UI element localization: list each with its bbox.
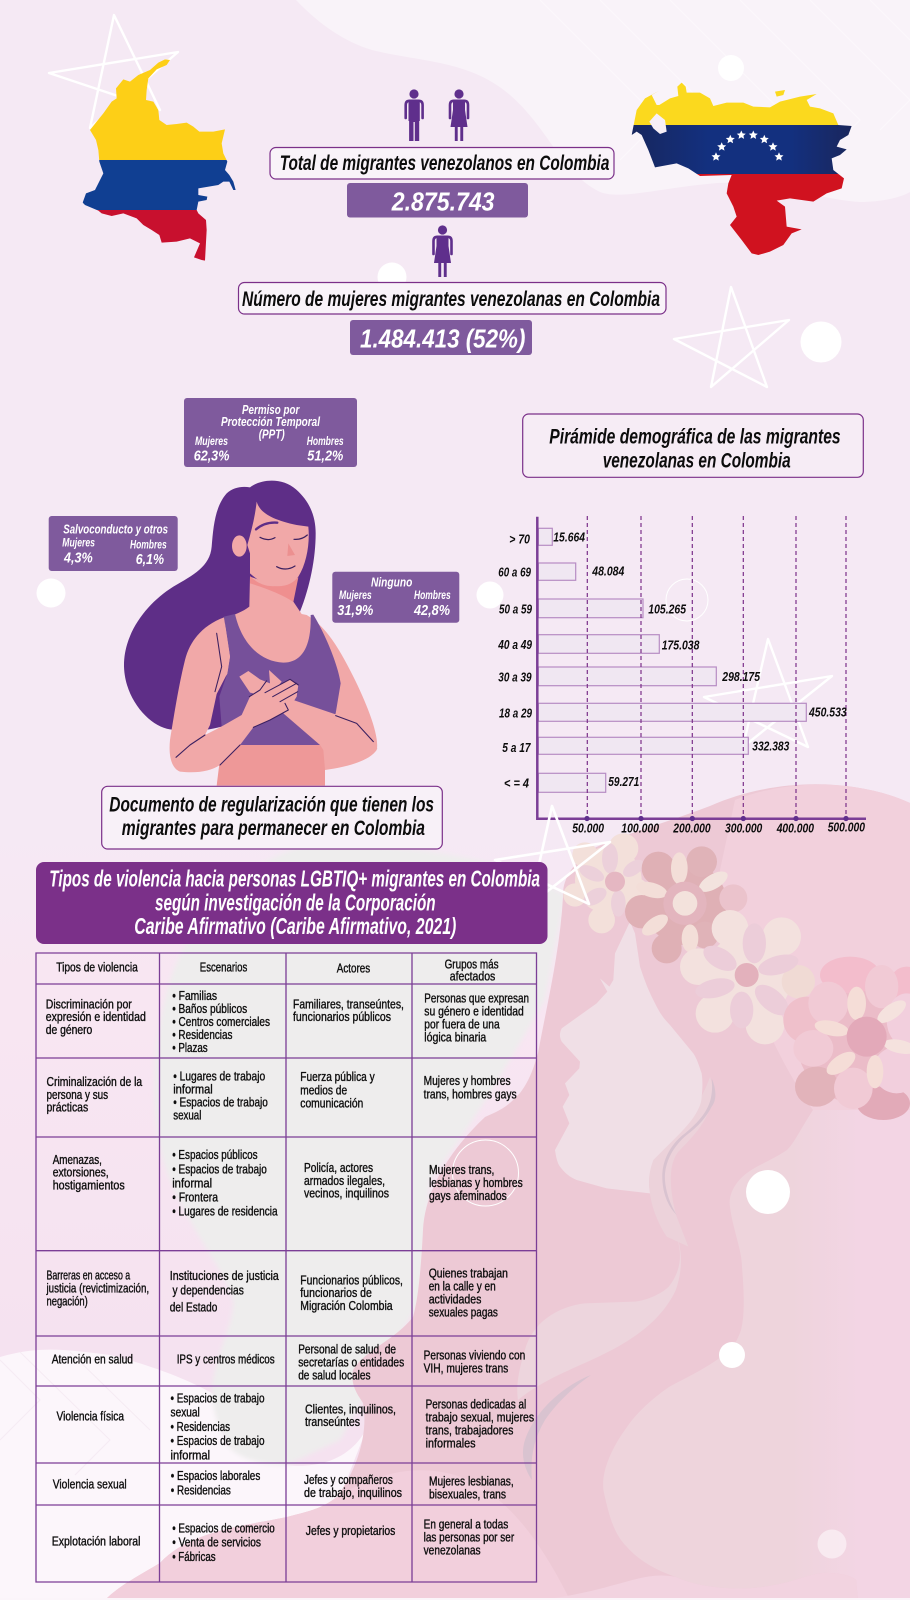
row: violencia sexual: de trabajo, inquilinos <box>304 1486 402 1500</box>
value labels: 175.038 <box>662 638 699 652</box>
flower: large right <box>783 957 910 1120</box>
bottom edge strip <box>0 1598 910 1600</box>
row: criminalización: • Espacios de trabajo <box>173 1096 268 1110</box>
axis labels: 100.000 <box>621 822 659 836</box>
callout: Salvoconducto: 6,1% <box>136 552 164 568</box>
row: explotación laboral <box>52 1518 514 1564</box>
row: barreras: y dependencias <box>172 1283 244 1297</box>
row: barreras: del Estado <box>170 1300 217 1314</box>
row: atención en salud <box>52 1342 525 1382</box>
flower: small left <box>563 833 648 933</box>
heading: regularization document <box>102 786 442 849</box>
eyes and smile <box>260 535 307 569</box>
callout: Ninguno: Ninguno <box>371 576 413 590</box>
table header: afectados <box>450 970 495 984</box>
callout: PPT: Protección Temporal <box>221 415 320 429</box>
heading: regularization document: migrantes para permanecer en Colombia <box>122 817 425 840</box>
row: discriminación: • Plazas <box>172 1041 208 1055</box>
decorative star: title <box>495 806 610 905</box>
flower: lilac <box>680 910 815 1044</box>
value labels: 332.383 <box>752 740 789 754</box>
row: amenazas: • Lugares de residencia <box>172 1205 278 1219</box>
row: atención en salud: Personas viviendo con <box>424 1349 525 1363</box>
island <box>775 90 785 97</box>
row: violencia física: informales <box>426 1436 476 1450</box>
heading: total migrants <box>270 148 614 179</box>
banner: violence table title: Tipos de violencia hacia personas LGBTIQ+ migrantes en Colombia <box>49 866 540 892</box>
row: atención en salud: VIH, mujeres trans <box>424 1361 508 1375</box>
hair: right bulge <box>860 1250 910 1430</box>
row: violencia física: • Residencias <box>170 1420 230 1434</box>
age labels: > 70 <box>509 532 530 546</box>
row: explotación laboral: Explotación laboral <box>52 1534 141 1548</box>
row: violencia física: trabajo sexual, mujeres <box>426 1411 534 1425</box>
row: discriminación: por fuera de una <box>424 1018 500 1032</box>
row: discriminación: • Baños públicos <box>172 1002 247 1016</box>
row: amenazas: Policía, actores <box>304 1161 373 1175</box>
row: criminalización: Mujeres y hombres <box>424 1074 511 1088</box>
row: violencia física: • Espacios de trabajo <box>170 1434 265 1448</box>
map: Colombia flag <box>82 59 236 261</box>
callout: Ninguno <box>332 572 459 623</box>
row: criminalización: medios de <box>300 1083 347 1097</box>
neck shadow <box>250 576 298 602</box>
row: amenazas: • Espacios públicos <box>172 1148 258 1162</box>
background blob: lower left white <box>0 1350 370 1600</box>
decorative star: top left <box>49 15 178 128</box>
banner: violence table title: Caribe Afirmativo (Caribe Afirmativo, 2021) <box>134 913 456 939</box>
map: Venezuela flag <box>632 82 852 255</box>
top <box>219 614 341 745</box>
table: types of violence <box>36 953 536 1582</box>
row: criminalización: informal <box>173 1083 213 1097</box>
row: explotación laboral: venezolanas <box>424 1544 481 1558</box>
row: atención en salud: Atención en salud <box>52 1352 133 1366</box>
background: pink hair silhouette <box>105 784 910 1600</box>
icon: man <box>406 89 423 141</box>
age labels: 60 a 69 <box>498 566 531 580</box>
row: discriminación: de género <box>46 1023 92 1037</box>
banner: violence table title: según investigación de la Corporación <box>155 890 436 916</box>
table header: Actores <box>337 962 370 976</box>
row: violencia física: • Espacios de trabajo <box>170 1392 265 1406</box>
row: violencia sexual: • Residencias <box>171 1483 231 1497</box>
row: explotación laboral: • Venta de servicios <box>172 1536 261 1550</box>
callout: PPT: Permiso por <box>242 403 300 417</box>
row: amenazas: • Frontera <box>172 1191 218 1205</box>
age labels: 50 a 59 <box>499 602 532 616</box>
row: amenazas: hostigamientos <box>53 1178 125 1192</box>
row: barreras: justicia (revictimización, <box>46 1281 149 1295</box>
value labels: 298.175 <box>721 670 761 684</box>
row: violencia física: Personas dedicadas al <box>426 1398 526 1412</box>
row: violencia sexual: Jefes y compañeros <box>304 1473 393 1487</box>
callout: Ninguno: Hombres <box>414 590 451 602</box>
axis labels: 300.000 <box>725 822 762 836</box>
heading: women migrants <box>238 282 666 314</box>
arm and hand outlines <box>176 633 373 765</box>
row: criminalización: Fuerza pública y <box>300 1070 375 1084</box>
row: barreras: Quienes trabajan <box>429 1266 508 1280</box>
hair strand lower <box>523 1375 591 1480</box>
row: discriminación: • Familias <box>172 989 217 1003</box>
row: barreras: Instituciones de justicia <box>170 1269 279 1283</box>
right forearm <box>283 700 377 769</box>
axis labels: 50.000 <box>572 822 604 836</box>
row: barreras: sexuales pagas <box>429 1305 498 1319</box>
banner: violence table title <box>36 862 548 944</box>
row: criminalización <box>46 1070 517 1122</box>
bars <box>538 528 806 792</box>
row: barreras <box>46 1266 508 1319</box>
flower: dark center <box>625 846 747 963</box>
row: violencia física: transeúntes <box>305 1415 360 1429</box>
row: violencia física: Clientes, inquilinos, <box>305 1402 396 1416</box>
callout: Salvoconducto <box>49 516 178 571</box>
hair: central light lock <box>603 1110 910 1600</box>
heading: regularization document: Documento de regularización que tienen los <box>109 794 434 817</box>
callout: Salvoconducto: Mujeres <box>62 538 95 550</box>
row: amenazas: lesbianas y hombres <box>429 1176 523 1190</box>
background blob: top right <box>296 0 910 202</box>
callout: Ninguno: 42,8% <box>413 603 450 619</box>
eyebrows <box>256 520 309 529</box>
axis labels: 200.000 <box>672 822 711 836</box>
row: explotación laboral: • Espacios de comercio <box>172 1522 275 1536</box>
background blob: grey wave <box>154 846 565 1465</box>
row: amenazas: vecinos, inquilinos <box>304 1187 389 1201</box>
decorative star: top right lower <box>674 287 789 387</box>
row: violencia física: informal <box>170 1448 210 1462</box>
face profile <box>555 922 702 1193</box>
callout: Ninguno: 31,9% <box>337 603 373 619</box>
row: discriminación: expresión e identidad <box>46 1010 146 1024</box>
row: amenazas <box>53 1148 523 1219</box>
heading: pyramid: venezolanas en Colombia <box>603 449 791 472</box>
axis dots <box>584 816 849 821</box>
illustration: woman with hands on chest <box>124 481 377 786</box>
row: barreras: funcionarios de <box>300 1286 372 1300</box>
callout: Salvoconducto: 4,3% <box>63 550 93 566</box>
value labels <box>553 531 847 789</box>
row: criminalización: Criminalización de la <box>46 1075 142 1089</box>
hair: upper right lighter <box>720 785 910 1110</box>
row: violencia sexual: Mujeres lesbianas, <box>429 1474 514 1488</box>
row: amenazas: informal <box>172 1176 212 1190</box>
row: barreras: negación) <box>46 1294 88 1308</box>
row: discriminación: funcionarios públicos <box>293 1010 391 1024</box>
row: amenazas: Amenazas, <box>53 1153 102 1167</box>
hair: light lock under chin <box>517 1220 681 1400</box>
table header: Escenarios <box>200 961 247 975</box>
axes <box>537 517 866 819</box>
axis labels: 500.000 <box>828 821 865 835</box>
heading: total migrants: Total de migrantes venezolanos en Colombia <box>280 152 610 175</box>
background: hair lower left lighter <box>105 1470 570 1600</box>
background lines: lower left <box>0 1352 150 1475</box>
table header: Tipos de violencia <box>56 961 138 975</box>
row: explotación laboral: las personas por ser <box>424 1531 514 1545</box>
lake <box>649 113 667 134</box>
number: total migrants: 2.875.743 <box>391 187 495 217</box>
row: violencia física: sexual <box>170 1406 200 1420</box>
row: discriminación <box>46 989 529 1055</box>
row: violencia física <box>56 1392 534 1462</box>
hair: bottom band <box>540 1573 858 1600</box>
row: discriminación: • Residencias <box>172 1028 232 1042</box>
table header: Grupos más <box>445 958 499 972</box>
belly <box>217 745 325 786</box>
row: criminalización: • Lugares de trabajo <box>173 1070 265 1084</box>
callout: Salvoconducto: Hombres <box>130 539 167 551</box>
callout: Salvoconducto: Salvoconducto y otros <box>63 522 168 536</box>
row: atención en salud: de salud locales <box>298 1368 370 1382</box>
row: criminalización: comunicación <box>300 1096 363 1110</box>
number: women migrants: 1.484.413 (52%) <box>360 323 525 353</box>
hair strip beside neck <box>649 1077 713 1247</box>
row: criminalización: persona y sus <box>46 1088 108 1102</box>
callout: PPT: 51,2% <box>307 449 343 465</box>
callout: Ninguno: Mujeres <box>339 590 372 602</box>
table header <box>56 958 499 984</box>
row: criminalización: prácticas <box>46 1101 88 1115</box>
age labels: 18 a 29 <box>499 706 532 720</box>
row: violencia sexual: bisexuales, trans <box>429 1487 506 1501</box>
icon: woman <box>450 89 468 141</box>
age labels: 40 a 49 <box>497 638 532 652</box>
row: discriminación: Familiares, transeúntes, <box>293 997 404 1011</box>
callout: PPT: Hombres <box>307 436 344 448</box>
age labels <box>497 532 532 790</box>
value labels: 450.533 <box>808 706 847 720</box>
callout: PPT: 62,3% <box>194 449 229 465</box>
bar chart: demographic pyramid <box>497 516 866 836</box>
row: barreras: Migración Colombia <box>300 1299 393 1313</box>
value labels: 48.084 <box>591 565 624 579</box>
callout: PPT: (PPT) <box>259 427 285 441</box>
row: amenazas: armados ilegales, <box>304 1174 385 1188</box>
row: explotación laboral: • Fábricas <box>172 1550 216 1564</box>
axis labels <box>572 821 865 836</box>
decorative star: chart <box>704 639 832 747</box>
row: amenazas: Mujeres trans, <box>429 1163 494 1177</box>
value labels: 59.271 <box>608 775 639 789</box>
row: barreras: Barreras en acceso a <box>46 1268 130 1282</box>
back hand <box>239 670 282 697</box>
background lines: top right <box>540 0 910 170</box>
row: violencia física: trans, trabajadores <box>426 1424 513 1438</box>
age labels: 5 a 17 <box>502 741 531 755</box>
callout: PPT: Mujeres <box>195 436 228 448</box>
heading: women migrants: Número de mujeres migrantes venezolanas en Colombia <box>242 288 660 311</box>
row: criminalización: trans, hombres gays <box>424 1087 517 1101</box>
row: violencia sexual <box>53 1469 514 1501</box>
gridlines <box>587 516 846 818</box>
row: discriminación: lógica binaria <box>424 1031 486 1045</box>
value labels: 15.664 <box>553 531 585 545</box>
face <box>247 502 309 586</box>
row: barreras: en la calle y en <box>429 1279 496 1293</box>
age labels: < = 4 <box>504 776 529 790</box>
hair <box>124 481 316 731</box>
heading: pyramid <box>523 414 863 477</box>
row: atención en salud: secretarías o entidades <box>298 1355 404 1369</box>
row: atención en salud: Personal de salud, de <box>298 1342 396 1356</box>
row: amenazas: extorsiones, <box>53 1166 109 1180</box>
illustration: woman profile with flower crown <box>555 833 910 1247</box>
row: barreras: actividades <box>429 1292 481 1306</box>
row: violencia sexual: Violencia sexual <box>53 1478 127 1492</box>
row: explotación laboral: En general a todas <box>424 1518 508 1532</box>
icon: flag stars <box>712 130 784 161</box>
ear <box>232 535 247 557</box>
left arm and front hand <box>170 617 298 772</box>
row: discriminación: • Centros comerciales <box>172 1015 270 1029</box>
chest and right arm <box>225 577 377 770</box>
callout: PPT <box>184 398 357 467</box>
row: explotación laboral: Jefes y propietarios <box>306 1524 395 1538</box>
row: barreras: Funcionarios públicos, <box>300 1273 403 1287</box>
number: total migrants <box>347 183 528 218</box>
row: discriminación: su género e identidad <box>424 1005 524 1019</box>
row: discriminación: Discriminación por <box>46 997 132 1011</box>
row: amenazas: • Espacios de trabajo <box>172 1162 267 1176</box>
row: violencia física: Violencia física <box>56 1410 124 1424</box>
row: amenazas: gays afeminados <box>429 1189 507 1203</box>
hair strand <box>662 1078 715 1215</box>
table grid <box>36 953 536 1582</box>
row: violencia sexual: • Espacios laborales <box>171 1469 260 1483</box>
age labels: 30 a 39 <box>498 671 532 685</box>
axis labels: 400.000 <box>776 822 814 836</box>
nose <box>287 543 295 556</box>
icon: woman <box>434 225 452 277</box>
row: criminalización: sexual <box>173 1108 201 1122</box>
value labels: 105.265 <box>648 602 687 616</box>
row: atención en salud: IPS y centros médicos <box>177 1352 275 1366</box>
row: discriminación: Personas que expresan <box>424 992 529 1006</box>
